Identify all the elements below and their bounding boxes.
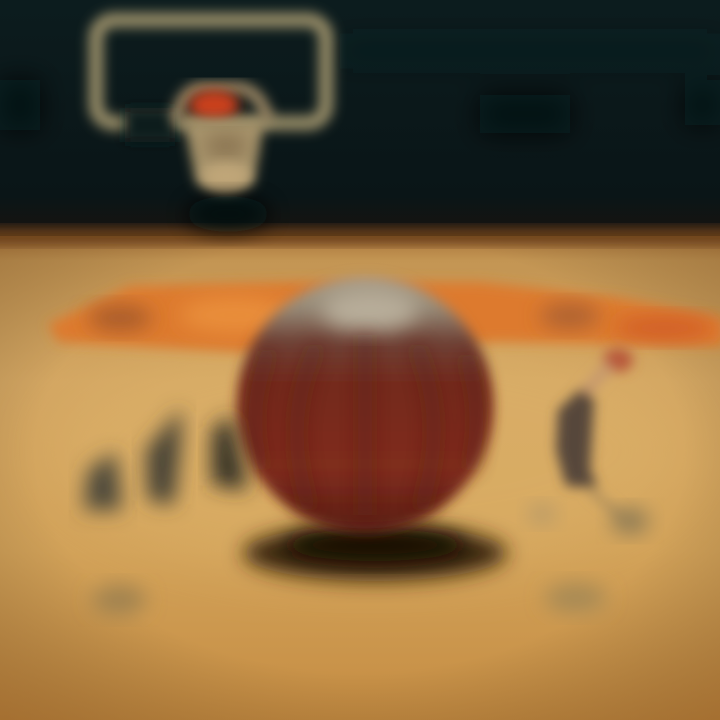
net shadow: [204, 135, 248, 157]
right figure: [556, 348, 633, 520]
basketball: [237, 277, 493, 533]
ball shadow: [243, 525, 507, 581]
floor edge: [0, 228, 720, 244]
hoop backboard: [96, 20, 326, 142]
band spot left: [88, 305, 152, 331]
floor vignette: [0, 236, 720, 720]
ball top highlight: [322, 290, 418, 330]
wall shading: [0, 42, 720, 133]
floor spot right: [545, 583, 607, 613]
band right deep orange: [615, 316, 715, 340]
right figure foot 2: [528, 504, 556, 524]
band spot right: [540, 303, 600, 329]
ball seams: [255, 335, 476, 515]
left figure 2: [146, 408, 182, 505]
floor glow: [50, 330, 690, 570]
hoop rim: [189, 90, 239, 120]
left figure 3: [212, 415, 248, 490]
hoop inner square: [176, 88, 268, 122]
left figure 1: [84, 452, 122, 510]
background wall: [0, 0, 720, 240]
floor spot left: [92, 585, 146, 615]
court floor: [0, 236, 720, 720]
hoop shadow: [186, 196, 270, 232]
right figure feet: [611, 508, 649, 534]
ball shadow core: [285, 529, 465, 561]
backboard bottom mask: [125, 108, 175, 142]
band highlight: [180, 297, 290, 333]
net: [184, 120, 264, 194]
net highlight: [202, 163, 250, 189]
orange key band: [48, 282, 720, 352]
